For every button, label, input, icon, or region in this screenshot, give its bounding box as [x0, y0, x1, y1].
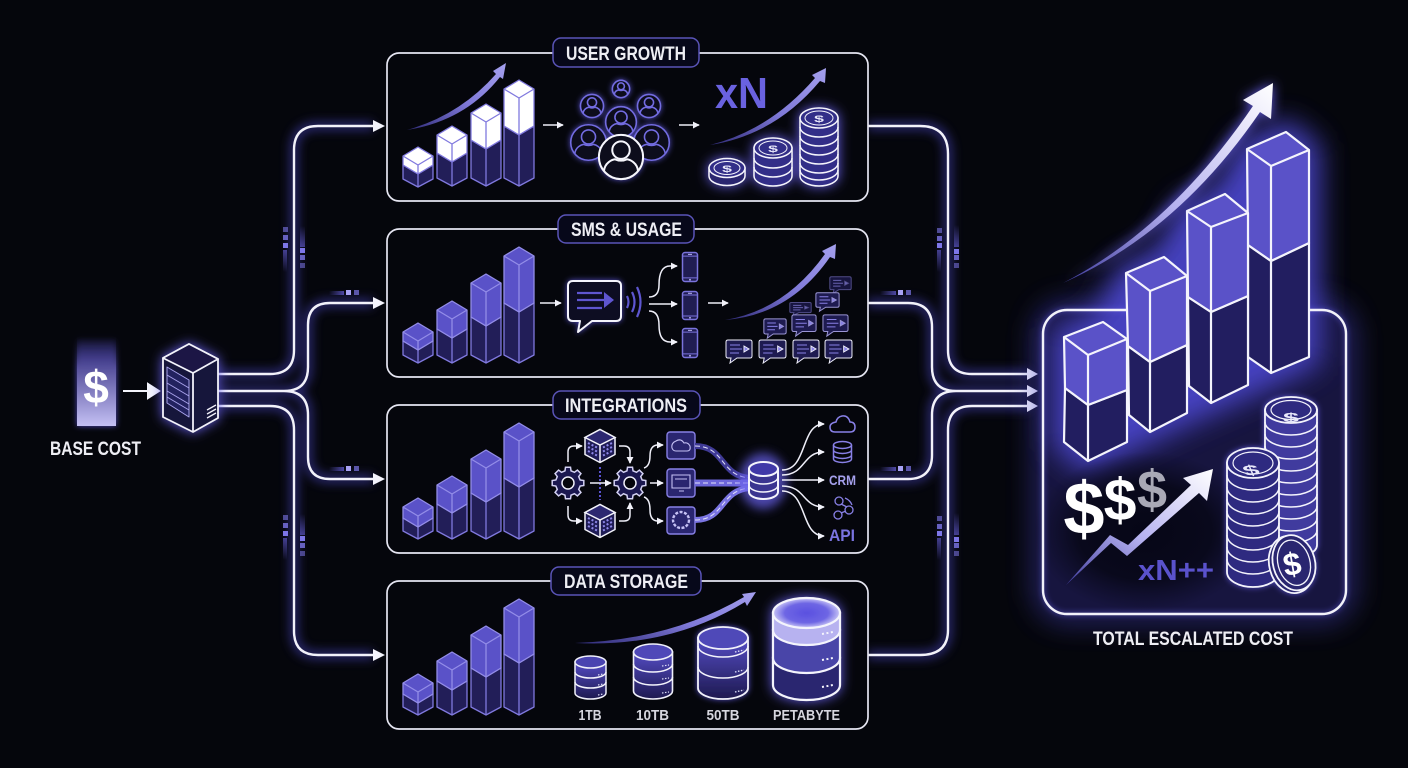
- arrow: base cost to server: [123, 384, 159, 398]
- bar chart: sms: [403, 247, 534, 363]
- flow ribbons to database: [695, 446, 750, 520]
- icon: integration cluster: [834, 497, 853, 519]
- icon: coin stacks: $: [814, 114, 824, 124]
- icon: user group: [571, 80, 669, 179]
- icon: petabyte database: [773, 598, 840, 700]
- icon: large coin stacks: $: [1240, 462, 1263, 479]
- arrow: phones to messages: [708, 302, 728, 304]
- connectors: base cost server to panels: [218, 120, 385, 661]
- icon: large coin stacks: $: [1283, 410, 1300, 425]
- icons: phones: [682, 253, 698, 357]
- icon: 1TB database: [575, 656, 606, 699]
- icon: message bubble: [568, 281, 621, 332]
- icon: signal waves: [627, 287, 640, 317]
- arrow: storage trend: [575, 592, 756, 643]
- panel: sms and usage: [387, 215, 868, 377]
- arrow: growth trend: [407, 63, 506, 130]
- label: API: API: [829, 526, 855, 545]
- arrow: cost trend: [710, 68, 826, 145]
- dollar signs: [1063, 460, 1167, 550]
- icon: 50TB database: [698, 627, 748, 699]
- arrows: fan out to phones: [649, 266, 677, 342]
- labels: storage tiers: 10TB: [636, 707, 669, 724]
- heading: sms and usage: SMS & USAGE: [571, 220, 682, 241]
- diagram: gears and cubes: [552, 430, 663, 538]
- data pulse markers on connectors: [283, 225, 959, 560]
- connectors: panels to total cost: [868, 126, 1038, 655]
- bar chart: storage: [403, 599, 534, 715]
- heading: integrations: INTEGRATIONS: [565, 396, 687, 417]
- arrow: bars to users: [543, 124, 563, 126]
- icon: 10TB database: [634, 644, 672, 699]
- dollar signs: $: [1104, 467, 1136, 533]
- icon: coin stacks: $: [768, 144, 778, 154]
- heading: sms and usage: [558, 215, 694, 243]
- panel: total escalated cost: [1033, 83, 1346, 614]
- multiplier: xN++: xN++: [1138, 555, 1214, 587]
- heading: integrations: [553, 391, 700, 419]
- arrow: message volume trend: [725, 244, 836, 320]
- panel: user growth: [387, 38, 868, 201]
- dollar signs: $: [1063, 467, 1105, 550]
- big bar chart: [1064, 132, 1309, 461]
- dollar signs: $: [1137, 460, 1167, 520]
- labels: storage tiers: PETABYTE: [773, 707, 840, 724]
- panel: data storage: [387, 567, 868, 729]
- label: base cost: BASE COST: [50, 439, 141, 460]
- multiplier: xN: xN: [715, 69, 768, 118]
- label: total escalated cost: TOTAL ESCALATED COST: [1093, 629, 1293, 650]
- icon: large coin stacks: [1227, 397, 1322, 598]
- icon: central database: [739, 453, 787, 509]
- heading: user growth: [553, 38, 699, 67]
- arrows: database to destinations: [782, 424, 824, 536]
- icons: service boxes: [667, 432, 695, 534]
- icon: database: [834, 442, 852, 463]
- icon: server: [163, 344, 218, 432]
- zigzag trend arrow: [1066, 469, 1213, 585]
- icon: large coin stacks: $: [1280, 545, 1304, 583]
- labels: storage tiers: 1TB: [578, 707, 602, 724]
- icon: cloud: [830, 416, 855, 432]
- icon: dollar bar: $: [83, 361, 109, 413]
- big growth arrow: [1063, 83, 1273, 283]
- arrow: bars to message: [540, 302, 561, 304]
- labels: storage tiers: [578, 707, 840, 724]
- heading: user growth: USER GROWTH: [566, 44, 686, 65]
- icons: message pile: [726, 277, 852, 363]
- heading: data storage: [551, 567, 701, 595]
- base cost: [50, 337, 141, 460]
- labels: storage tiers: 50TB: [706, 707, 740, 724]
- bar chart: integrations: [403, 423, 534, 539]
- label: CRM: CRM: [829, 472, 856, 488]
- heading: data storage: DATA STORAGE: [564, 572, 688, 593]
- panel: integrations: [387, 391, 868, 553]
- arrow: users to cost: [679, 124, 699, 126]
- icon: coin stacks: $: [722, 164, 732, 174]
- bar chart: user growth: [403, 80, 534, 187]
- icon: coin stacks: [709, 108, 838, 186]
